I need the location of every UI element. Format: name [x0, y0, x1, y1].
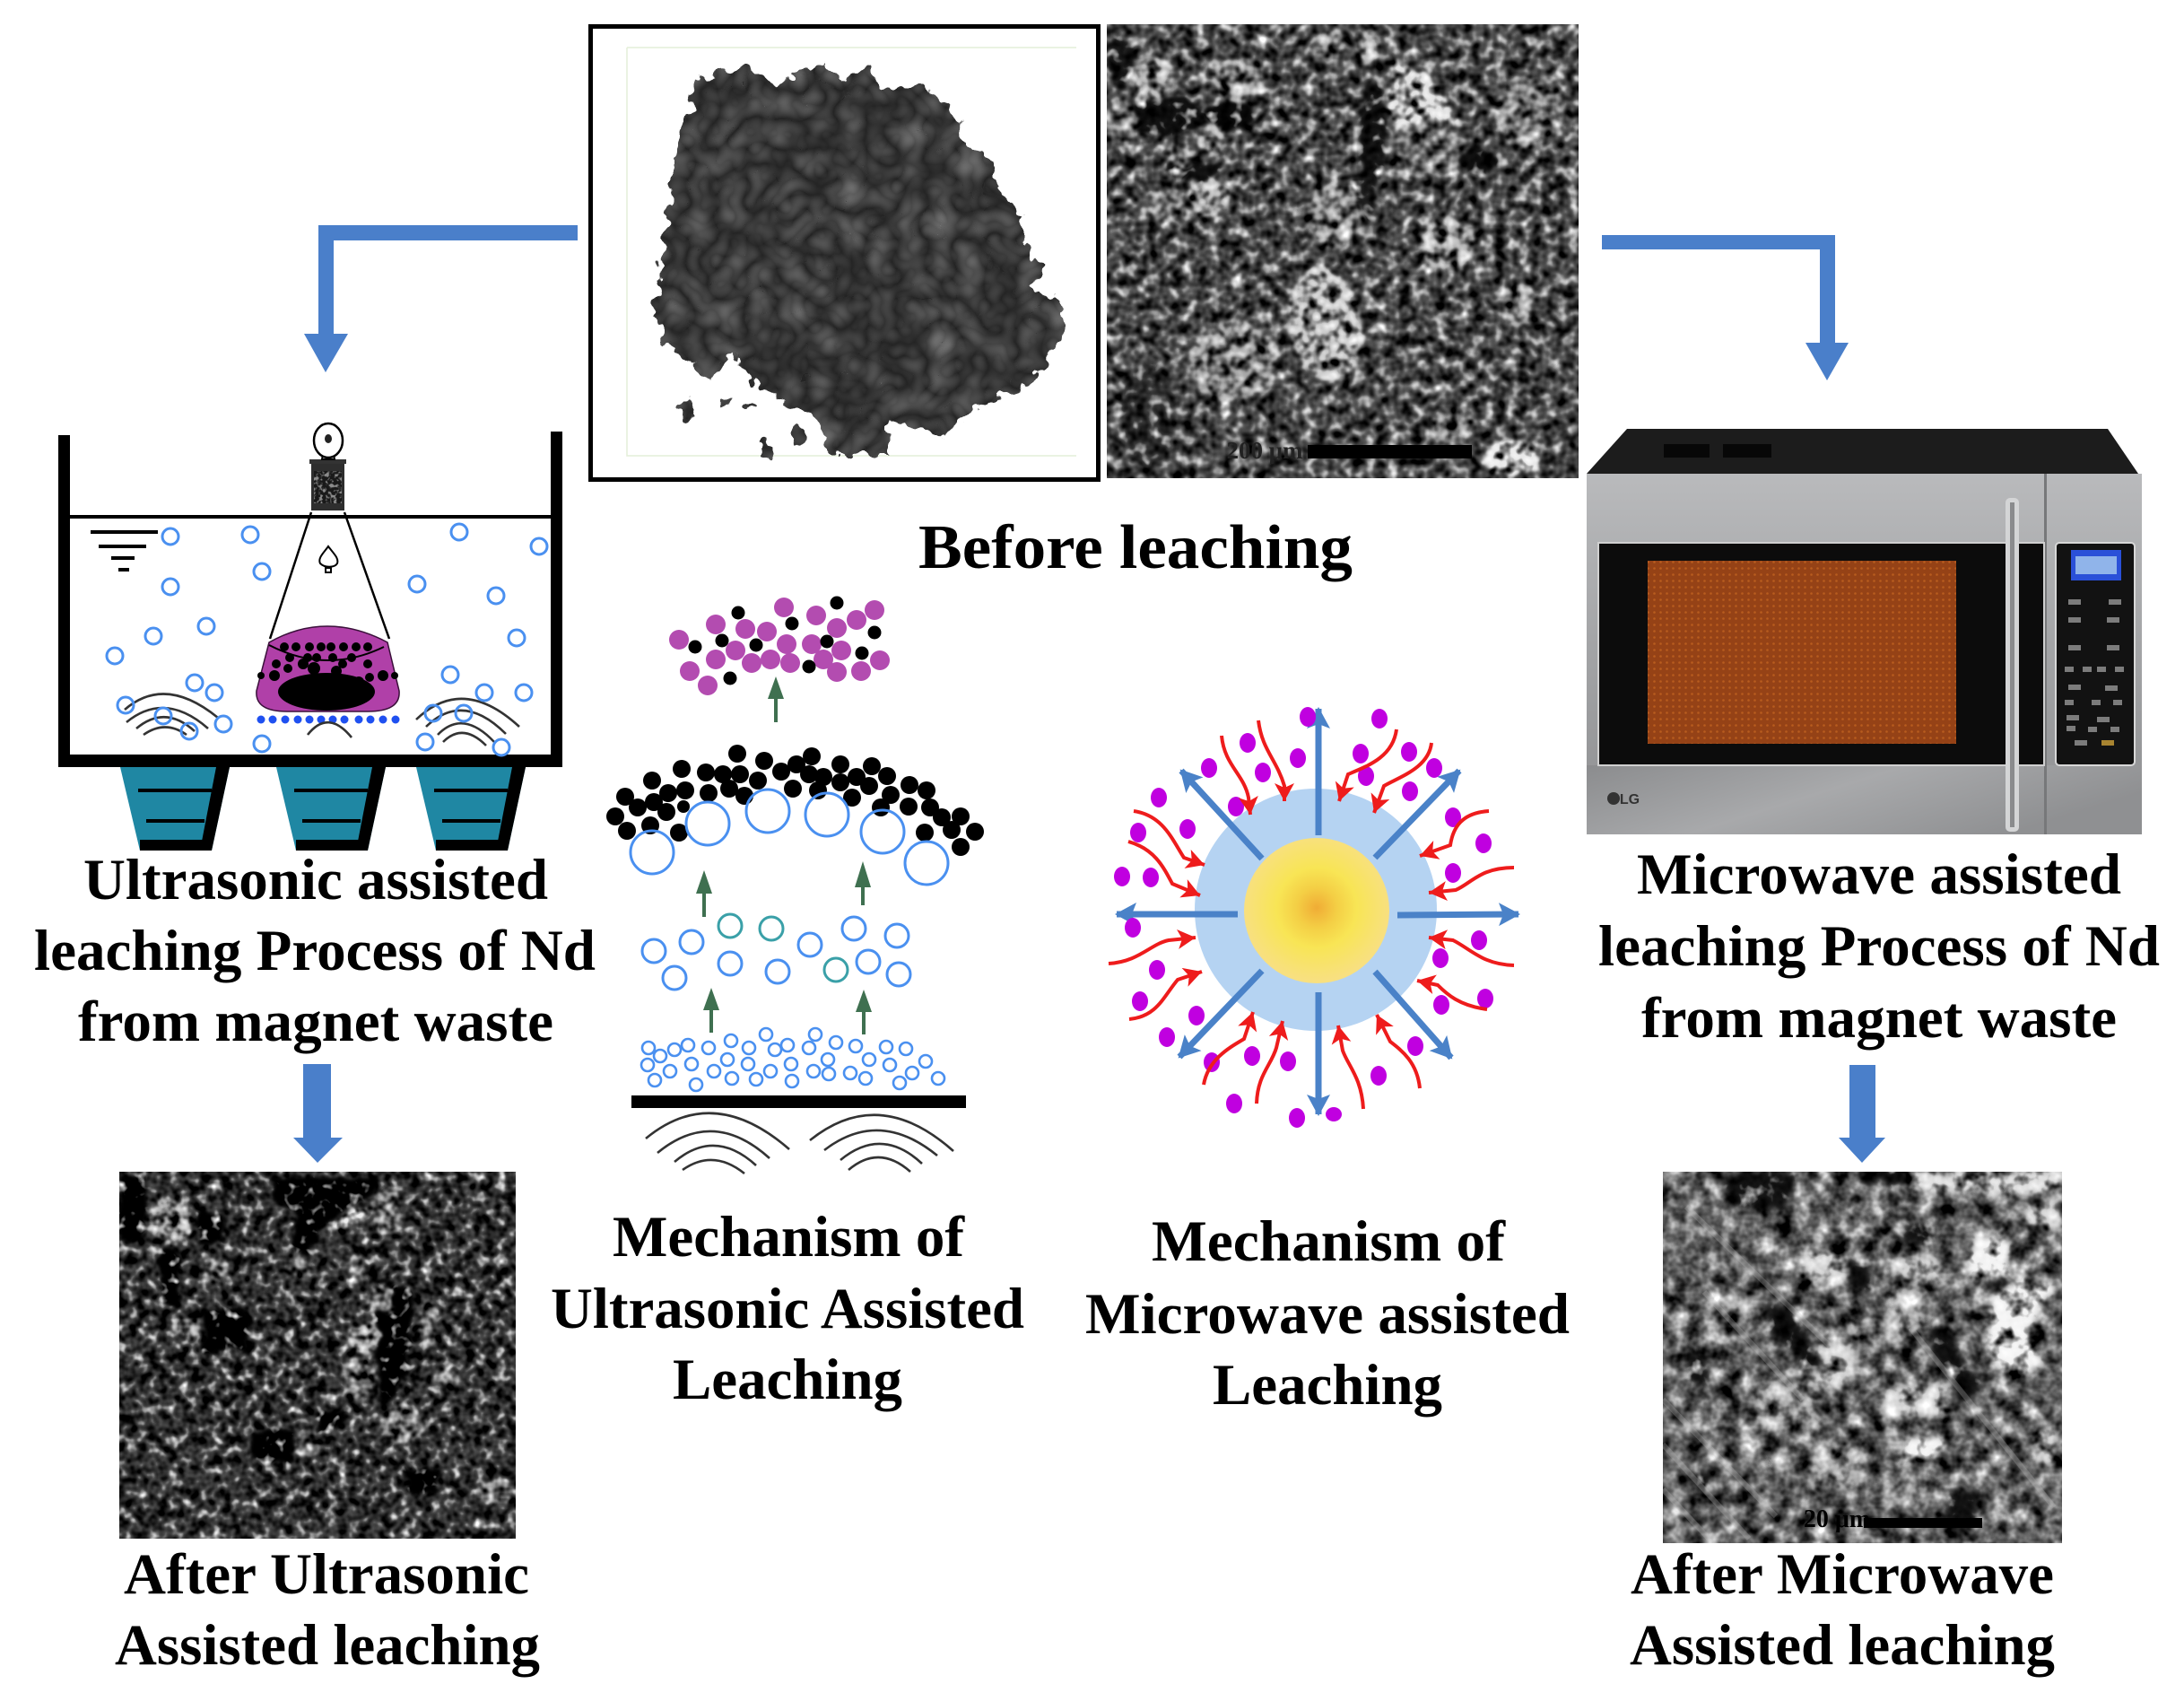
bath ultrasonic waves: [125, 694, 519, 746]
caption: microwave process: Microwave assisted: [1637, 842, 2121, 907]
caption: after microwave: After Microwave: [1631, 1542, 2054, 1607]
collapsing large bubbles: [631, 790, 948, 885]
diagonal streaks: [1663, 1207, 2054, 1543]
display: [2071, 550, 2121, 580]
heated shell: [1195, 789, 1437, 1031]
top vents: [1664, 444, 1771, 458]
scale bar: [1864, 1518, 1982, 1528]
bath bubbles: [107, 524, 547, 755]
magnet particle layer: [606, 745, 984, 856]
transducer feet: [120, 767, 526, 851]
caption: ultrasonic mechanism: Mechanism of: [613, 1205, 965, 1270]
caption: after ultrasonic: Assisted leaching: [115, 1613, 540, 1678]
caption: after ultrasonic: [115, 1542, 540, 1678]
panel: SEM after microwave leaching: [1663, 1172, 2062, 1543]
panel: SEM before leaching: [1105, 24, 1579, 478]
flask: [257, 512, 399, 711]
arrow: ultrasonic process to result: [293, 1064, 343, 1163]
control buttons: [2065, 599, 2124, 746]
cavitation dots: [257, 716, 400, 723]
green arrows: [696, 676, 872, 1034]
scale label: 20 μm: [1804, 1505, 1870, 1533]
caption: microwave mechanism: Mechanism of: [1152, 1209, 1506, 1274]
oven body: [1587, 474, 2142, 834]
panel: ultrasonic bath diagram: [58, 423, 562, 851]
inward microwave arrows: [1109, 720, 1514, 1109]
growing bubbles: [642, 914, 910, 990]
panel: ultrasonic mechanism diagram: [606, 596, 984, 1174]
panel: SEM after ultrasonic leaching: [119, 1172, 516, 1539]
mechanism waves: [646, 1113, 953, 1174]
caption: after microwave: Assisted leaching: [1630, 1613, 2055, 1678]
purple ions: [1114, 707, 1493, 1128]
spade symbol: [319, 546, 337, 572]
scale label: 200 μm: [1226, 437, 1303, 464]
transducer bar: [631, 1095, 966, 1108]
LG logo: LG: [1620, 792, 1640, 807]
arrow: powder to ultrasonic: [304, 225, 578, 372]
caption: ultrasonic process: from magnet waste: [78, 990, 553, 1054]
caption: ultrasonic mechanism: [551, 1205, 1024, 1412]
arrow: powder to microwave: [1602, 235, 1849, 380]
small bubbles: [641, 1028, 944, 1091]
caption: ultrasonic process: leaching Process of Nd: [34, 919, 596, 983]
arrow: microwave process to result: [1839, 1065, 1885, 1163]
tank: [58, 432, 562, 767]
door handle: [2006, 498, 2019, 832]
caption: ultrasonic mechanism: Leaching: [673, 1348, 902, 1412]
flask stopper: [309, 423, 346, 510]
heading: before leaching: Before leaching: [918, 513, 1353, 582]
panel: microwave oven: [1587, 429, 2142, 834]
powder heap: [653, 65, 1064, 458]
outward heat arrows: [1117, 709, 1518, 1114]
leached particle cluster: [669, 596, 890, 695]
oven top: [1587, 429, 2138, 474]
water surface line: [70, 515, 551, 519]
caption: microwave process: [1598, 842, 2160, 1051]
water level symbol: [91, 530, 158, 572]
scale bar: [1308, 445, 1472, 458]
caption: microwave mechanism: [1085, 1209, 1570, 1418]
caption: after microwave: [1630, 1542, 2055, 1678]
cavity mesh: [1648, 561, 1956, 744]
caption: microwave process: from magnet waste: [1641, 986, 2117, 1051]
LG logo: [1607, 792, 1640, 807]
panel: microwave mechanism diagram: [1109, 707, 1518, 1128]
caption: ultrasonic mechanism: Ultrasonic Assisted: [551, 1277, 1024, 1341]
caption: ultrasonic process: [34, 848, 596, 1054]
particle core: [1244, 838, 1389, 983]
caption: microwave mechanism: Leaching: [1213, 1353, 1442, 1418]
caption: microwave process: leaching Process of Nd: [1598, 914, 2160, 979]
panel: powder photograph: [590, 27, 1098, 479]
caption: after ultrasonic: After Ultrasonic: [124, 1542, 529, 1607]
caption: ultrasonic process: Ultrasonic assisted: [83, 848, 548, 912]
caption: microwave mechanism: Microwave assisted: [1085, 1282, 1570, 1347]
door window: [1598, 543, 2044, 765]
control panel: [2056, 543, 2135, 765]
